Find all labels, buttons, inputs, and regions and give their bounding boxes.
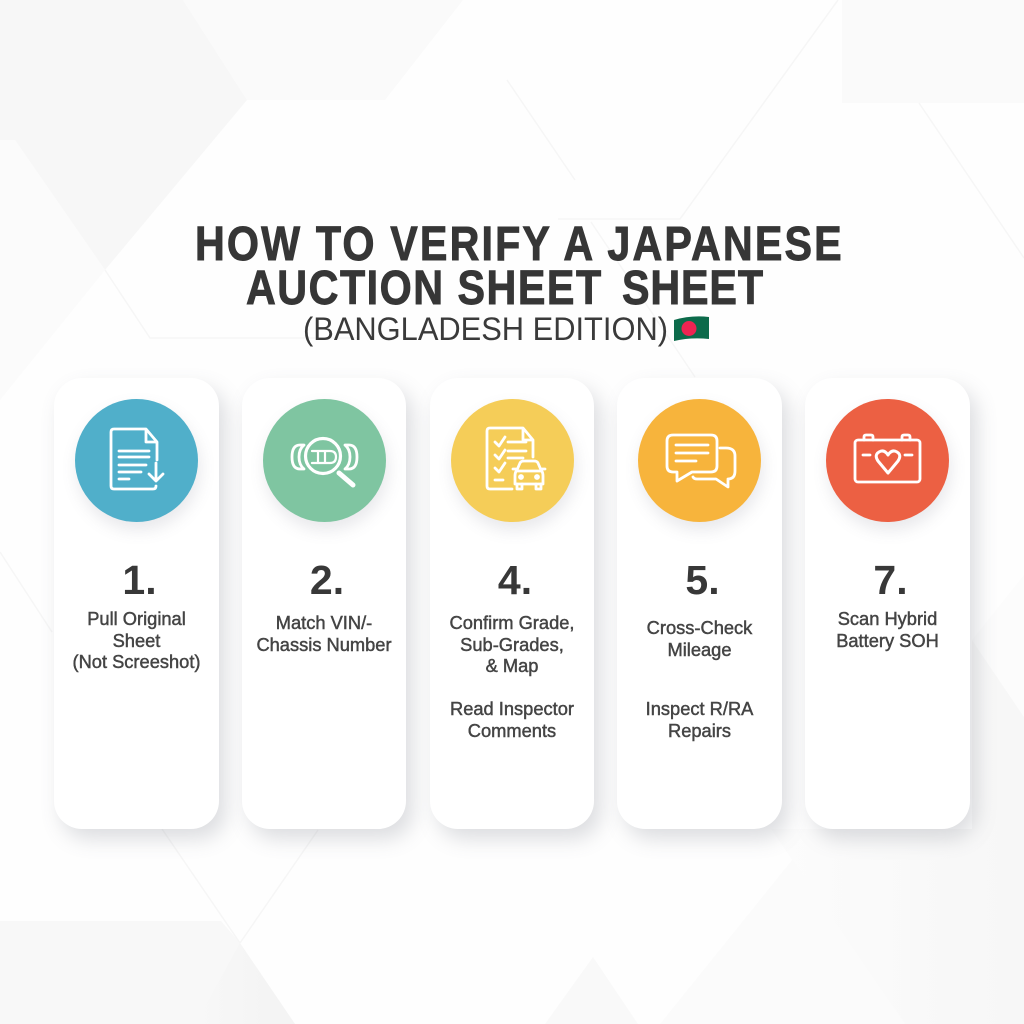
step 2 label: Chassis Number [256,634,392,655]
step 5 label [647,617,753,660]
step number 4: 4. [498,557,532,603]
step 2 label [256,612,392,655]
step 4 second label [450,698,574,741]
title [195,217,842,347]
icon: chat bubbles [638,399,761,522]
icon: Bangladesh flag [674,316,709,341]
step 2 label: Match VIN/- [276,612,372,633]
step number 2: 2. [310,557,344,603]
step 7 label: Scan Hybrid [838,608,937,629]
panel: step 1 [54,378,219,829]
title line 2: SHEET [622,261,763,315]
title line 1: HOW TO VERIFY A JAPANESE [195,217,842,271]
step 1 label: Pull Original [87,608,186,629]
step 1 label [72,608,200,672]
title line 2 [246,261,763,315]
step number 5: 5. [685,557,720,603]
panel: step 2 [242,378,406,829]
panel: step 7 [805,378,970,829]
step 1 label: Sheet [113,630,160,651]
icon: battery with heart [826,399,949,522]
step 5 second label [646,698,754,742]
icon: checklist and car [451,399,574,522]
step 7 label: Battery SOH [836,630,939,651]
step 5 second label: Repairs [668,720,731,741]
panel: step 5 [617,378,782,829]
step number 7: 7. [873,557,908,603]
step 7 label [836,608,939,652]
step 4 second label: Read Inspector [450,698,574,719]
step 5 label: Mileage [667,639,732,660]
icon: document download [75,399,198,522]
step 4 second label: Comments [468,720,556,741]
title line 2: AUCTION SHEET [246,261,601,315]
step 4 label [450,612,574,676]
subtitle: (BANGLADESH EDITION) [303,311,668,347]
step 5 label: Cross-Check [647,617,752,638]
step number 1: 1. [122,557,157,603]
icon: VIN magnifier [263,399,386,522]
step 4 label: & Map [486,655,538,676]
step 5 second label: Inspect R/RA [646,698,753,719]
step 1 label: (Not Screeshot) [72,651,200,672]
step 4 label: Sub-Grades, [460,634,564,655]
panel: step 4 [430,378,594,829]
step 4 label: Confirm Grade, [450,612,574,633]
